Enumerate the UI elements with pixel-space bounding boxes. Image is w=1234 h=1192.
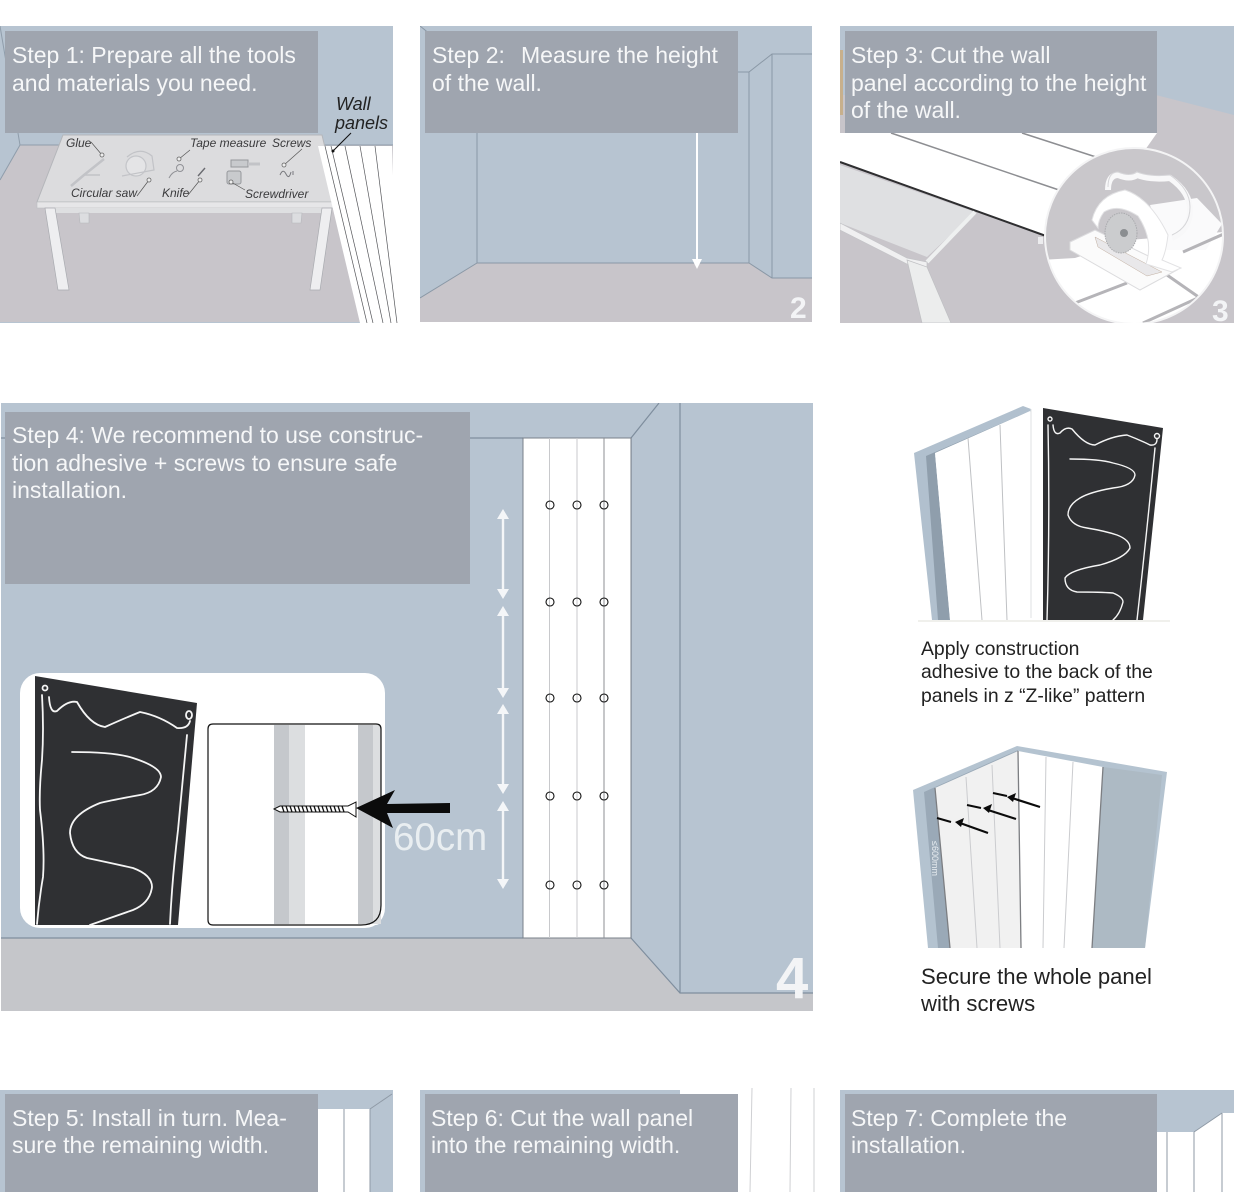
step 2 caption box: Step 2: xyxy=(432,42,505,68)
step 2 caption box: of the wall. xyxy=(432,70,542,96)
tool labels: Screws xyxy=(272,136,311,150)
screws caption: with screws xyxy=(920,991,1035,1016)
step 3 number: 3 xyxy=(1212,295,1229,328)
table corner xyxy=(840,165,975,323)
step 2 caption box: Measure the height xyxy=(521,42,719,68)
panel: step 6 xyxy=(420,1088,814,1192)
wall frame and white panel xyxy=(914,406,1170,621)
step 5 caption box: Step 5: Install in turn. Mea- xyxy=(12,1105,287,1131)
panel: step 3 xyxy=(840,26,1234,330)
screw positions xyxy=(546,501,608,889)
tool labels: Knife xyxy=(162,186,190,200)
step 4 caption box: installation. xyxy=(12,477,127,503)
inset: screw detail xyxy=(208,724,381,925)
step 3 caption box: panel according to the height xyxy=(851,70,1147,96)
60cm label: 60cm xyxy=(393,816,487,859)
step 6 caption box xyxy=(425,1094,738,1192)
figure: secure panel with screws xyxy=(913,746,1167,1016)
tool labels: Tape measure xyxy=(190,136,267,150)
adhesive caption: panels in z “Z-like” pattern xyxy=(921,685,1145,707)
panel: step 1 xyxy=(0,26,398,323)
corner walls and panels: ≤600mm xyxy=(930,841,940,876)
black panel back with adhesive xyxy=(1043,408,1163,620)
panel: step 4 xyxy=(1,403,813,1011)
step 2 number: 2 xyxy=(790,292,807,325)
panel: step 5 xyxy=(0,1090,393,1192)
step 2 room background xyxy=(420,26,812,322)
step 5 caption box xyxy=(5,1094,318,1192)
step 7 room background xyxy=(840,1090,1234,1192)
step 5 caption box: sure the remaining width. xyxy=(12,1132,269,1158)
corner walls and panels xyxy=(913,746,1167,948)
step 6 caption box: Step 6: Cut the wall panel xyxy=(431,1105,693,1131)
big black arrow xyxy=(356,790,450,828)
adhesive caption xyxy=(921,638,1153,707)
step 7 caption box: installation. xyxy=(851,1132,966,1158)
installed white panel xyxy=(523,438,631,938)
adhesive caption: Apply construction xyxy=(921,638,1079,660)
screws and arrows xyxy=(937,793,1040,833)
adhesive caption: adhesive to the back of the xyxy=(921,661,1153,683)
height arrow xyxy=(692,133,702,269)
step 1 caption box: Step 1: Prepare all the tools xyxy=(12,42,296,68)
step 4 caption box: tion adhesive + screws to ensure safe xyxy=(12,450,397,476)
step 4 number: 4 xyxy=(776,946,808,1011)
saw magnifier circle xyxy=(1040,148,1230,330)
planks on table xyxy=(840,133,1157,244)
tool labels xyxy=(66,136,311,201)
step 1 caption box xyxy=(5,31,318,133)
panel: step 2 xyxy=(420,26,812,325)
step 1 room background xyxy=(0,26,393,323)
step 2 caption box xyxy=(425,31,738,133)
wall panels label xyxy=(332,94,388,152)
panel: step 7 xyxy=(840,1090,1234,1192)
wall panels leaning xyxy=(318,146,398,323)
inset: adhesive panel back xyxy=(35,676,197,925)
step 6 room background xyxy=(420,1088,814,1192)
step 4 room background xyxy=(1,403,813,1011)
screws caption: Secure the whole panel xyxy=(921,964,1152,989)
step 1 caption box: and materials you need. xyxy=(12,70,258,96)
step 6 caption box: into the remaining width. xyxy=(431,1132,680,1158)
step 3 background xyxy=(840,26,1234,323)
wall panels label: panels xyxy=(334,113,388,133)
step 7 caption box: Step 7: Complete the xyxy=(851,1105,1067,1131)
step 5 room background xyxy=(0,1090,393,1192)
figure: apply adhesive to panel xyxy=(914,406,1170,707)
wall panels label: Wall xyxy=(336,94,372,114)
step 3 caption box xyxy=(845,31,1157,133)
detail inset xyxy=(20,673,385,928)
tool icons on table xyxy=(71,151,293,186)
tool labels: Circular saw xyxy=(71,186,138,200)
step 4 caption box xyxy=(5,412,470,584)
tool labels: Screwdriver xyxy=(245,187,309,201)
step 7 caption box xyxy=(845,1094,1157,1192)
step 3 caption box: Step 3: Cut the wall xyxy=(851,42,1050,68)
spacing double arrows xyxy=(497,509,509,889)
step 4 caption box: Step 4: We recommend to use construc- xyxy=(12,422,423,448)
table xyxy=(37,135,338,290)
tool labels: Glue xyxy=(66,136,92,150)
step 3 caption box: of the wall. xyxy=(851,97,961,123)
screws caption xyxy=(920,964,1152,1016)
